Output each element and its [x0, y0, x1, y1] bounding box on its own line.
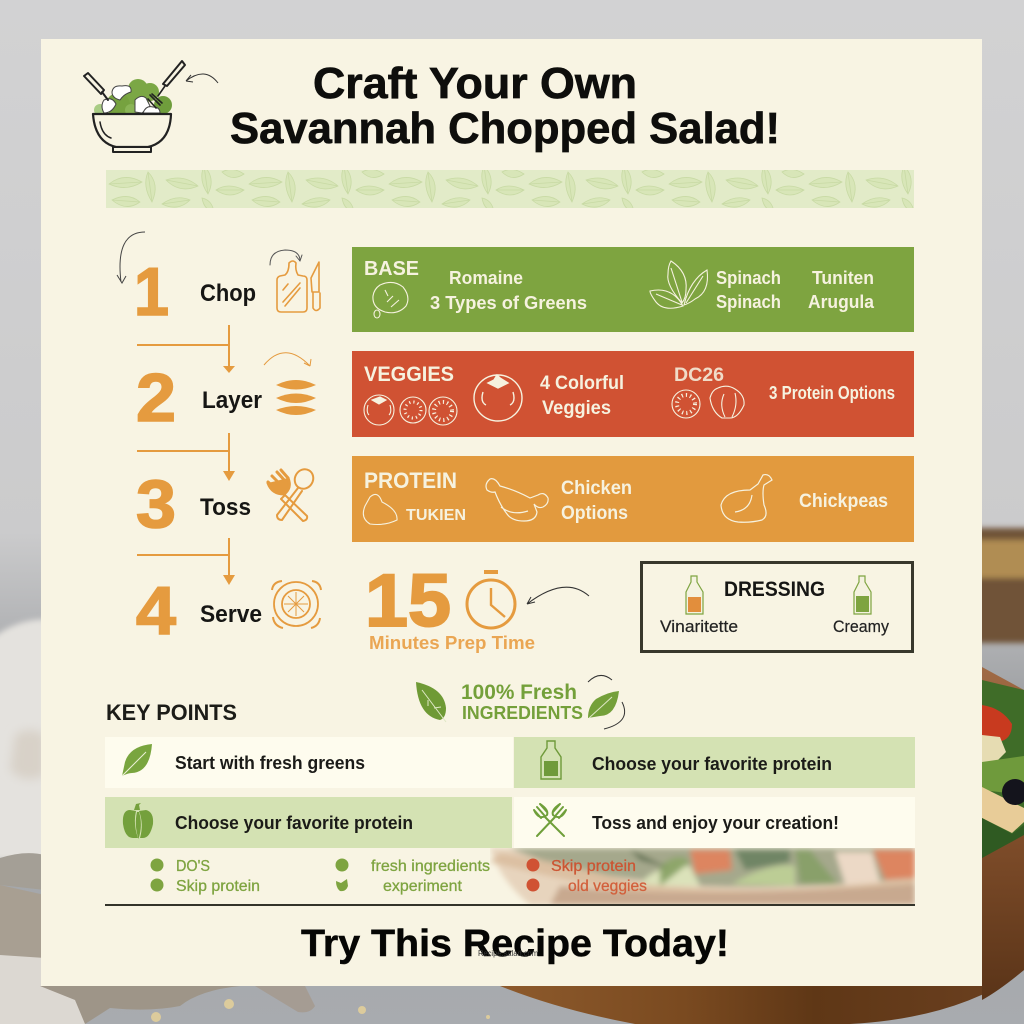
panel: base: Spinach [716, 268, 781, 288]
panel: veggies [352, 351, 914, 437]
salad right [982, 680, 1024, 858]
panel: dressing: Creamy [833, 618, 890, 636]
key point: choose favorite protein left: Choose your favorite protein [175, 812, 413, 833]
fresh ingredients badge: INGREDIENTS [462, 703, 583, 723]
wooden bowl bottom [500, 900, 1024, 1024]
key point: choose favorite protein right: Choose your favorite protein [592, 753, 832, 774]
dos list [150, 858, 490, 895]
key point: choose favorite protein left [105, 797, 512, 848]
title [230, 59, 780, 153]
panel: base [352, 247, 914, 332]
arrow: step 2 to 3 [137, 433, 235, 481]
panel: protein: PROTEIN [364, 468, 457, 493]
blurred bowl top right [960, 528, 1024, 643]
key points heading: KEY POINTS [106, 700, 237, 725]
icon: green bottle [854, 576, 871, 614]
dos list: Skip protein [176, 878, 260, 895]
arrow: curved start [117, 232, 145, 283]
icon: large tomato [474, 375, 522, 421]
arrow: to stopwatch [527, 587, 589, 604]
icon: leaf [122, 744, 152, 776]
icon: pepper [123, 803, 153, 839]
prep time callout: Minutes Prep Time [369, 633, 535, 653]
divider line [105, 904, 915, 906]
icon: stopwatch [467, 572, 515, 628]
panel: protein [352, 456, 914, 542]
spoon [255, 986, 315, 1012]
title: Craft Your Own [313, 59, 637, 108]
icon: small chicken [363, 494, 397, 524]
panel: base: Arugula [808, 292, 875, 312]
dos list: DO'S [176, 858, 210, 875]
panel: veggies: 3 Protein Options [769, 383, 895, 403]
key point: toss and enjoy [514, 797, 915, 848]
panel: base: Romaine [449, 268, 523, 288]
prep time callout: 15 [365, 559, 451, 642]
panel: base: 3 Types of Greens [430, 293, 587, 313]
small overlaid caption: Recipe.salad.com [478, 949, 538, 958]
donts list: old veggies [568, 878, 647, 895]
icon: cutting board and knife [270, 250, 320, 312]
icon: salad bowl [84, 61, 185, 152]
step 3 toss: 3 [136, 466, 176, 542]
panel: base: Spinach [716, 292, 781, 312]
panel: protein: Chickpeas [799, 491, 888, 512]
step 2 layer [136, 353, 316, 436]
icon: slice and pepper [672, 386, 744, 418]
icon: lettuce [373, 282, 408, 318]
panel: dressing [642, 562, 912, 652]
step 2 layer: 2 [136, 360, 176, 436]
step 1 chop [134, 250, 320, 330]
icon: right leaf [588, 691, 619, 718]
panel: protein: Chicken [561, 478, 632, 499]
step 3 toss: Toss [200, 494, 251, 521]
key point: toss and enjoy: Toss and enjoy your creation! [592, 812, 839, 833]
panel: veggies: 4 Colorful [540, 373, 624, 394]
icon: spinach leaves [650, 261, 708, 308]
icon: plate [272, 581, 321, 628]
call to action: Try This Recipe Today! [301, 923, 729, 965]
panel: veggies: Veggies [542, 398, 611, 419]
fresh ingredients badge [416, 675, 625, 729]
icon: layers [264, 353, 316, 415]
key point: start with fresh greens [105, 737, 513, 788]
panel: protein: Options [561, 503, 628, 524]
step 4 serve: 4 [136, 573, 176, 649]
icon: orange bottle [686, 576, 703, 614]
icon: orbit arcs [588, 675, 625, 729]
icon: left leaf [416, 682, 446, 722]
dos list: experiment [383, 878, 463, 895]
arrow: step 1 to 2 [137, 325, 235, 373]
panel: base: BASE [364, 258, 419, 280]
step 3 toss [136, 466, 317, 542]
prep time callout [365, 559, 589, 653]
panel: veggies: VEGGIES [364, 363, 454, 386]
panel: dressing: DRESSING [724, 578, 825, 601]
icon: fork and spoon [268, 466, 317, 521]
step 4 serve: Serve [200, 601, 262, 628]
icon: small tomato and slices [364, 395, 457, 425]
key point: choose favorite protein right [514, 737, 915, 788]
salad photo strip [490, 848, 915, 905]
icon: chicken leg [486, 479, 548, 521]
step 1 chop: Chop [200, 280, 256, 307]
donts list [526, 858, 647, 895]
arrow: step 3 to 4 [137, 538, 235, 585]
key point: start with fresh greens: Start with fresh greens [175, 752, 365, 773]
step 4 serve [136, 573, 321, 649]
step 1 chop: 1 [134, 254, 169, 330]
title: Savannah Chopped Salad! [230, 104, 780, 153]
panel: base: Tuniten [812, 268, 874, 288]
icon: crossed forks [534, 804, 566, 836]
arrow: curved near bowl [186, 74, 218, 83]
crumbs [151, 999, 490, 1022]
donts list: Skip protein [551, 858, 636, 875]
step 2 layer: Layer [202, 387, 262, 414]
panel: veggies: DC26 [674, 365, 724, 386]
fresh ingredients badge: 100% Fresh [461, 681, 577, 704]
leaf pattern band [106, 170, 914, 208]
icon: bottle [541, 741, 561, 779]
panel: protein: TUKIEN [406, 507, 466, 524]
dos list: fresh ingredients [371, 858, 490, 875]
icon: roast chicken [721, 475, 772, 522]
cloth left [0, 619, 240, 1024]
panel: dressing: Vinaritette [660, 618, 738, 636]
